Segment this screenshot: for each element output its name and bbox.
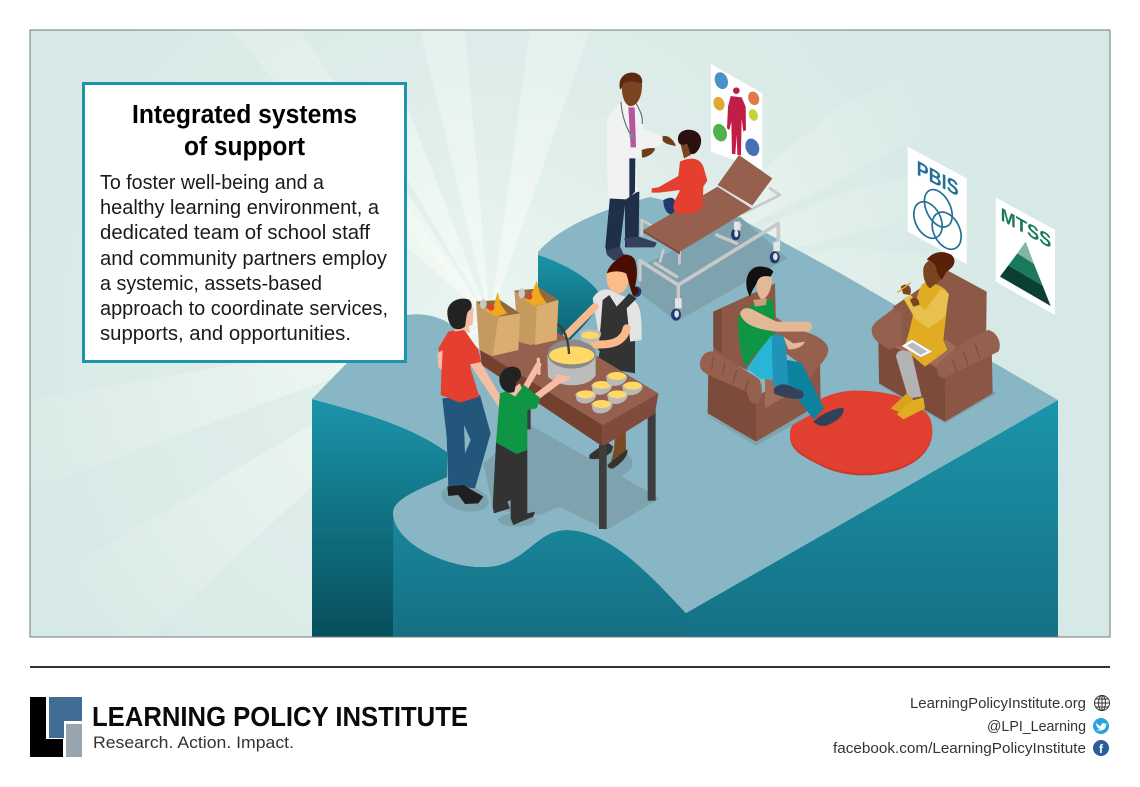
illustration panel (30, 30, 1110, 640)
platform top surface (312, 197, 1058, 613)
stretcher (632, 155, 780, 321)
adult in red shirt (437, 299, 506, 516)
icon: facebook: f (1099, 742, 1104, 756)
platform notch wall (538, 255, 600, 345)
footer divider (30, 666, 1110, 668)
body text (100, 172, 388, 345)
heading: of support (184, 133, 305, 161)
tagline: Research. Action. Impact. (93, 734, 294, 752)
sunburst background (30, 30, 1110, 637)
logo mark (30, 697, 82, 757)
icon: twitter (1093, 718, 1109, 734)
panel border (30, 30, 1110, 637)
callout: integrated systems of support (84, 84, 406, 362)
poster: PBIS: PBIS (917, 156, 959, 201)
child patient (652, 130, 707, 214)
contact links: @LPI_Learning (987, 718, 1086, 735)
body text: dedicated team of school staff (100, 222, 370, 244)
platform walls (312, 399, 1058, 640)
scene: counseling area (700, 147, 1055, 475)
heading: Integrated systems (132, 101, 357, 129)
soup pot (547, 324, 596, 385)
server (567, 254, 642, 477)
heading (132, 101, 357, 161)
poster: PBIS (908, 147, 967, 264)
scene: food table (437, 254, 660, 530)
poster: body chart (711, 64, 762, 170)
woman seated (891, 252, 954, 419)
body text: approach to coordinate services, (100, 298, 388, 320)
contact links (833, 695, 1086, 757)
bowls (575, 329, 643, 413)
poster: MTSS (996, 197, 1055, 315)
doctor (605, 73, 676, 261)
body text: and community partners employ (100, 248, 387, 270)
poster: MTSS: MTSS (1001, 204, 1051, 253)
man seated (738, 267, 844, 426)
table shadow (483, 425, 660, 530)
rug (790, 391, 932, 475)
contact links: facebook.com/LearningPolicyInstitute (833, 740, 1086, 757)
body text: To foster well-being and a (100, 172, 325, 194)
grocery bags (476, 281, 558, 356)
body text: healthy learning environment, a (100, 197, 380, 219)
icon: facebook (1093, 740, 1109, 756)
icon: globe (1094, 696, 1110, 710)
scene: doctor and stretcher (605, 64, 787, 322)
body text: supports, and opportunities. (100, 323, 351, 345)
stretcher shadow (640, 217, 787, 322)
armchair: left (700, 283, 828, 446)
armchair: right (872, 270, 1000, 423)
table (480, 330, 658, 529)
body text: a systemic, assets-based (100, 273, 322, 295)
organization name: LEARNING POLICY INSTITUTE (92, 701, 468, 732)
child in green shirt (493, 359, 570, 527)
contact links: LearningPolicyInstitute.org (910, 695, 1086, 712)
